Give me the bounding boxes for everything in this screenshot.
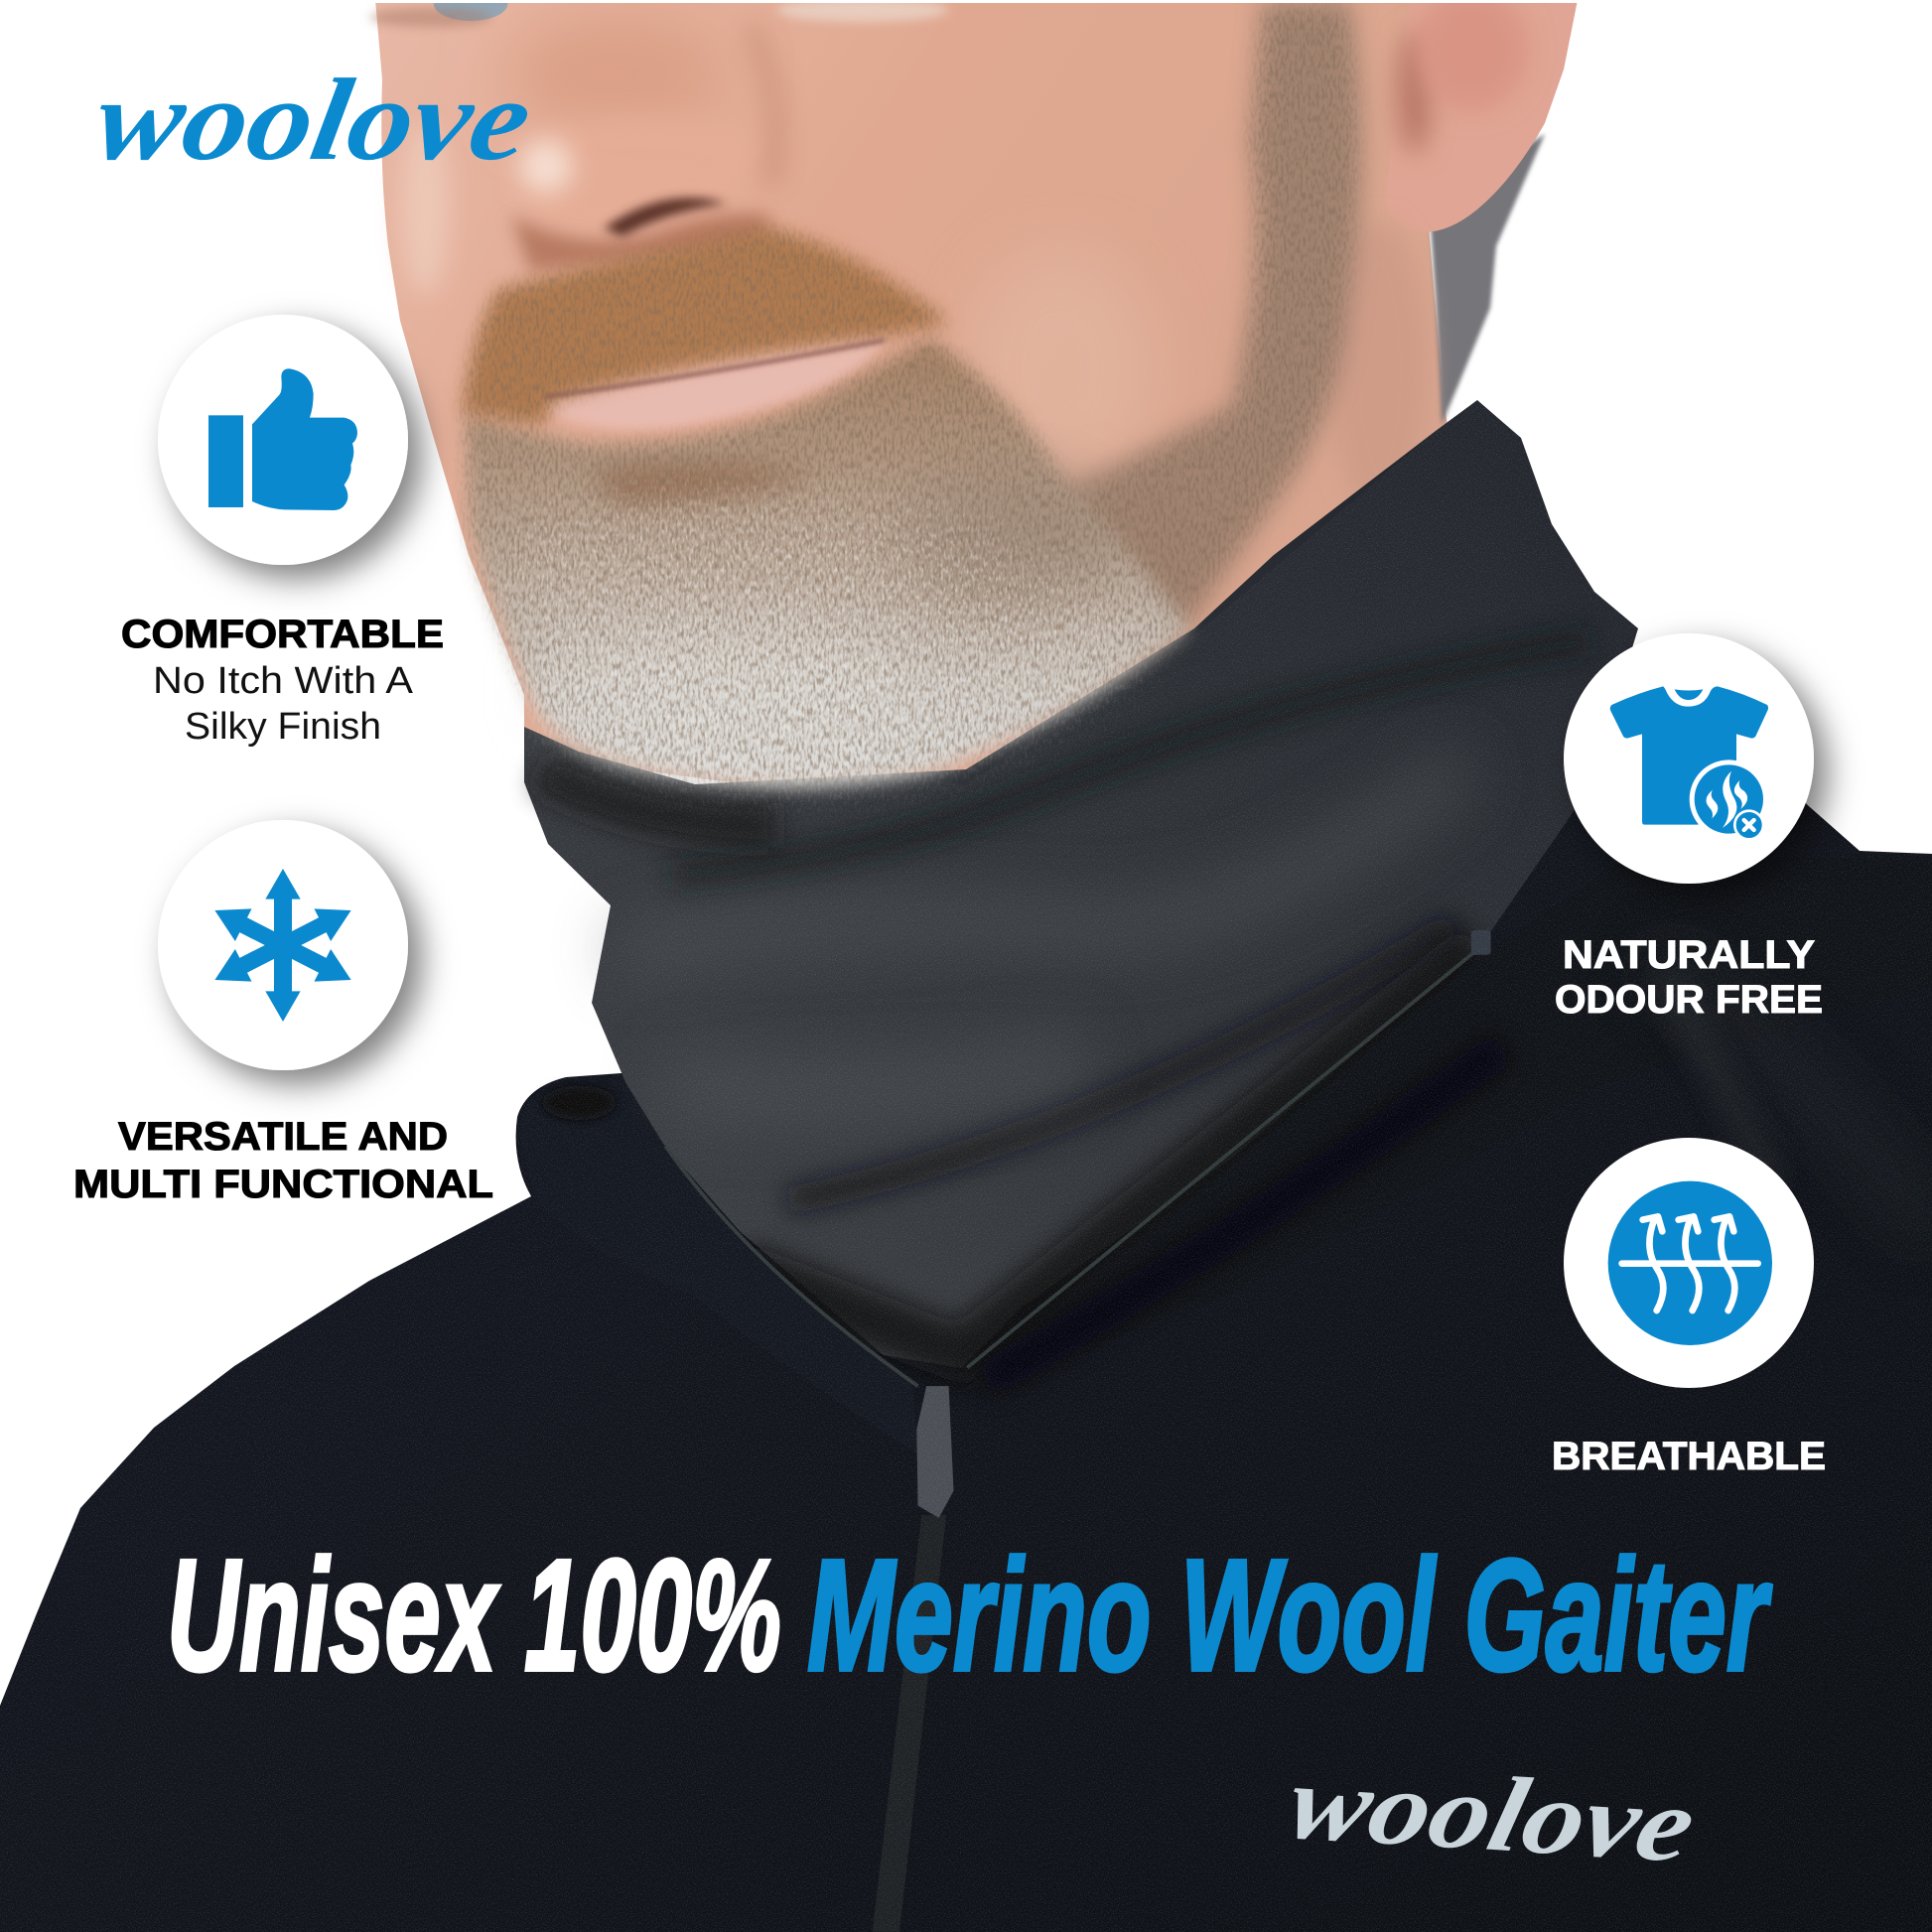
icon: breathable fabric	[1608, 1181, 1772, 1345]
badge: versatile	[158, 820, 408, 1070]
eye	[433, 3, 508, 22]
panel: odour free	[1555, 633, 1823, 1022]
mustache	[462, 228, 949, 425]
title	[167, 1526, 1772, 1704]
heading: odour free: ODOUR FREE	[1555, 978, 1823, 1022]
jaw stubble	[1070, 3, 1374, 656]
mouth line	[545, 341, 885, 397]
hair	[1430, 134, 1545, 425]
badge: breathable	[1564, 1138, 1814, 1388]
jacket collar right	[961, 850, 1932, 1392]
ear	[1410, 3, 1577, 232]
heading: multi functional: MULTI FUNCTIONAL	[73, 1163, 493, 1206]
heading: breathable: BREATHABLE	[1552, 1435, 1826, 1478]
gaiter folds	[671, 640, 1589, 875]
heading: comfortable: COMFORTABLE	[121, 613, 444, 656]
hair texture	[0, 0, 1932, 986]
panel: breathable	[1552, 1138, 1826, 1478]
text: silky finish: Silky Finish	[185, 706, 381, 748]
panel: versatile	[73, 820, 493, 1206]
face	[375, 0, 1449, 814]
badge: odour free	[1564, 633, 1814, 884]
zipper upper	[665, 1146, 918, 1386]
zipper lower	[873, 1515, 946, 1932]
jacket collar left	[663, 1144, 905, 1380]
gaiter	[524, 400, 1638, 1368]
icon: thumbs up	[208, 368, 357, 510]
heading: naturally: NATURALLY	[1563, 933, 1815, 977]
jacket	[0, 695, 1932, 1932]
lips	[542, 336, 890, 429]
title: white part: Unisex 100%	[167, 1526, 781, 1704]
beard base	[466, 339, 1189, 786]
logo top: woolove	[86, 55, 541, 185]
panel: comfortable	[121, 315, 444, 748]
zip pull	[916, 1386, 954, 1518]
badge: comfortable	[158, 315, 408, 565]
face shading	[505, 12, 727, 136]
icon: six arrows	[207, 869, 359, 1022]
icon: t-shirt with odour	[1610, 686, 1768, 839]
text: no itch: No Itch With A	[153, 660, 414, 702]
logo on jacket: woolove	[1277, 1742, 1707, 1884]
nose	[516, 117, 752, 231]
heading: versatile: VERSATILE AND	[118, 1115, 448, 1159]
zip tab	[1471, 930, 1491, 955]
